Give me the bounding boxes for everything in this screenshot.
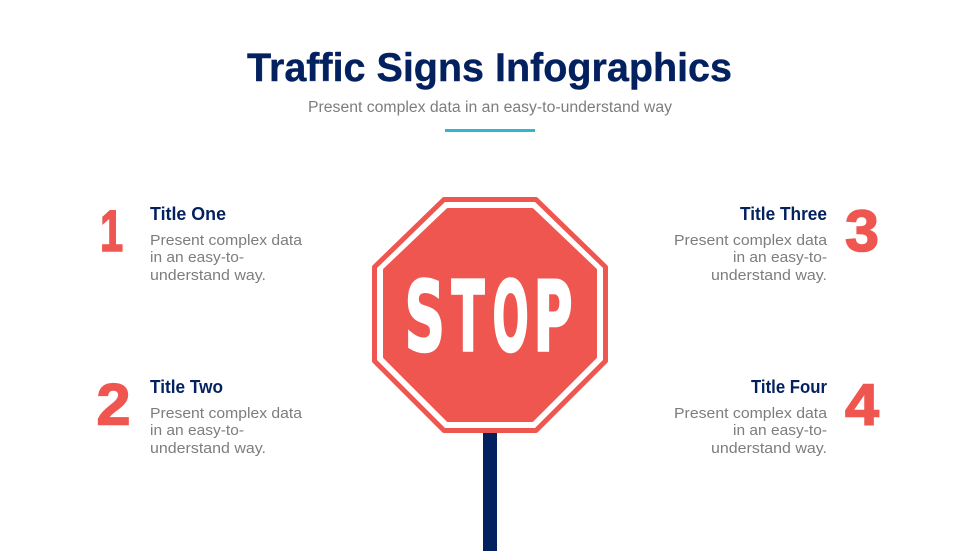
description 1: Present complex data [150,232,303,249]
sign word STOP: T [452,262,485,375]
description 4: understand way. [711,440,827,457]
description 4: Present complex data [674,405,828,422]
sign red face [385,210,595,420]
description 1 [150,232,303,284]
title: Traffic Signs Infographics [247,46,732,90]
description 2 [150,405,303,457]
description 3: Present complex data [674,232,828,249]
description 3: understand way. [711,267,827,284]
title accent bar [445,129,535,132]
description 4 [674,405,828,457]
description 2: understand way. [150,440,266,457]
item 3 [674,199,879,284]
description 4: in an easy-to- [733,422,827,439]
heading: Title Four: Title Four [751,377,827,397]
description 1: in an easy-to- [150,249,244,266]
heading: Title Two: Title Two [150,377,223,397]
description 2: Present complex data [150,405,303,422]
sign pole [483,432,497,551]
subtitle: Present complex data in an easy-to-understand way [308,99,672,116]
sign word STOP: P [534,261,573,374]
sign word STOP: S [404,260,445,374]
sign word STOP [404,260,573,375]
item 2 [96,372,303,457]
stop sign [374,200,606,430]
number 2: 2 [96,372,130,438]
number 3: 3 [845,199,879,264]
sign outer border [374,200,606,430]
description 3 [674,232,828,284]
item 1 [100,198,303,284]
sign word STOP: O [492,260,529,374]
heading: Title One: Title One [150,204,226,224]
heading: Title Three: Title Three [740,204,827,224]
number 4: 4 [845,372,879,438]
description 1: understand way. [150,267,266,284]
description 2: in an easy-to- [150,422,244,439]
number 1: 1 [100,198,123,264]
item 4 [674,372,879,457]
description 3: in an easy-to- [733,249,827,266]
